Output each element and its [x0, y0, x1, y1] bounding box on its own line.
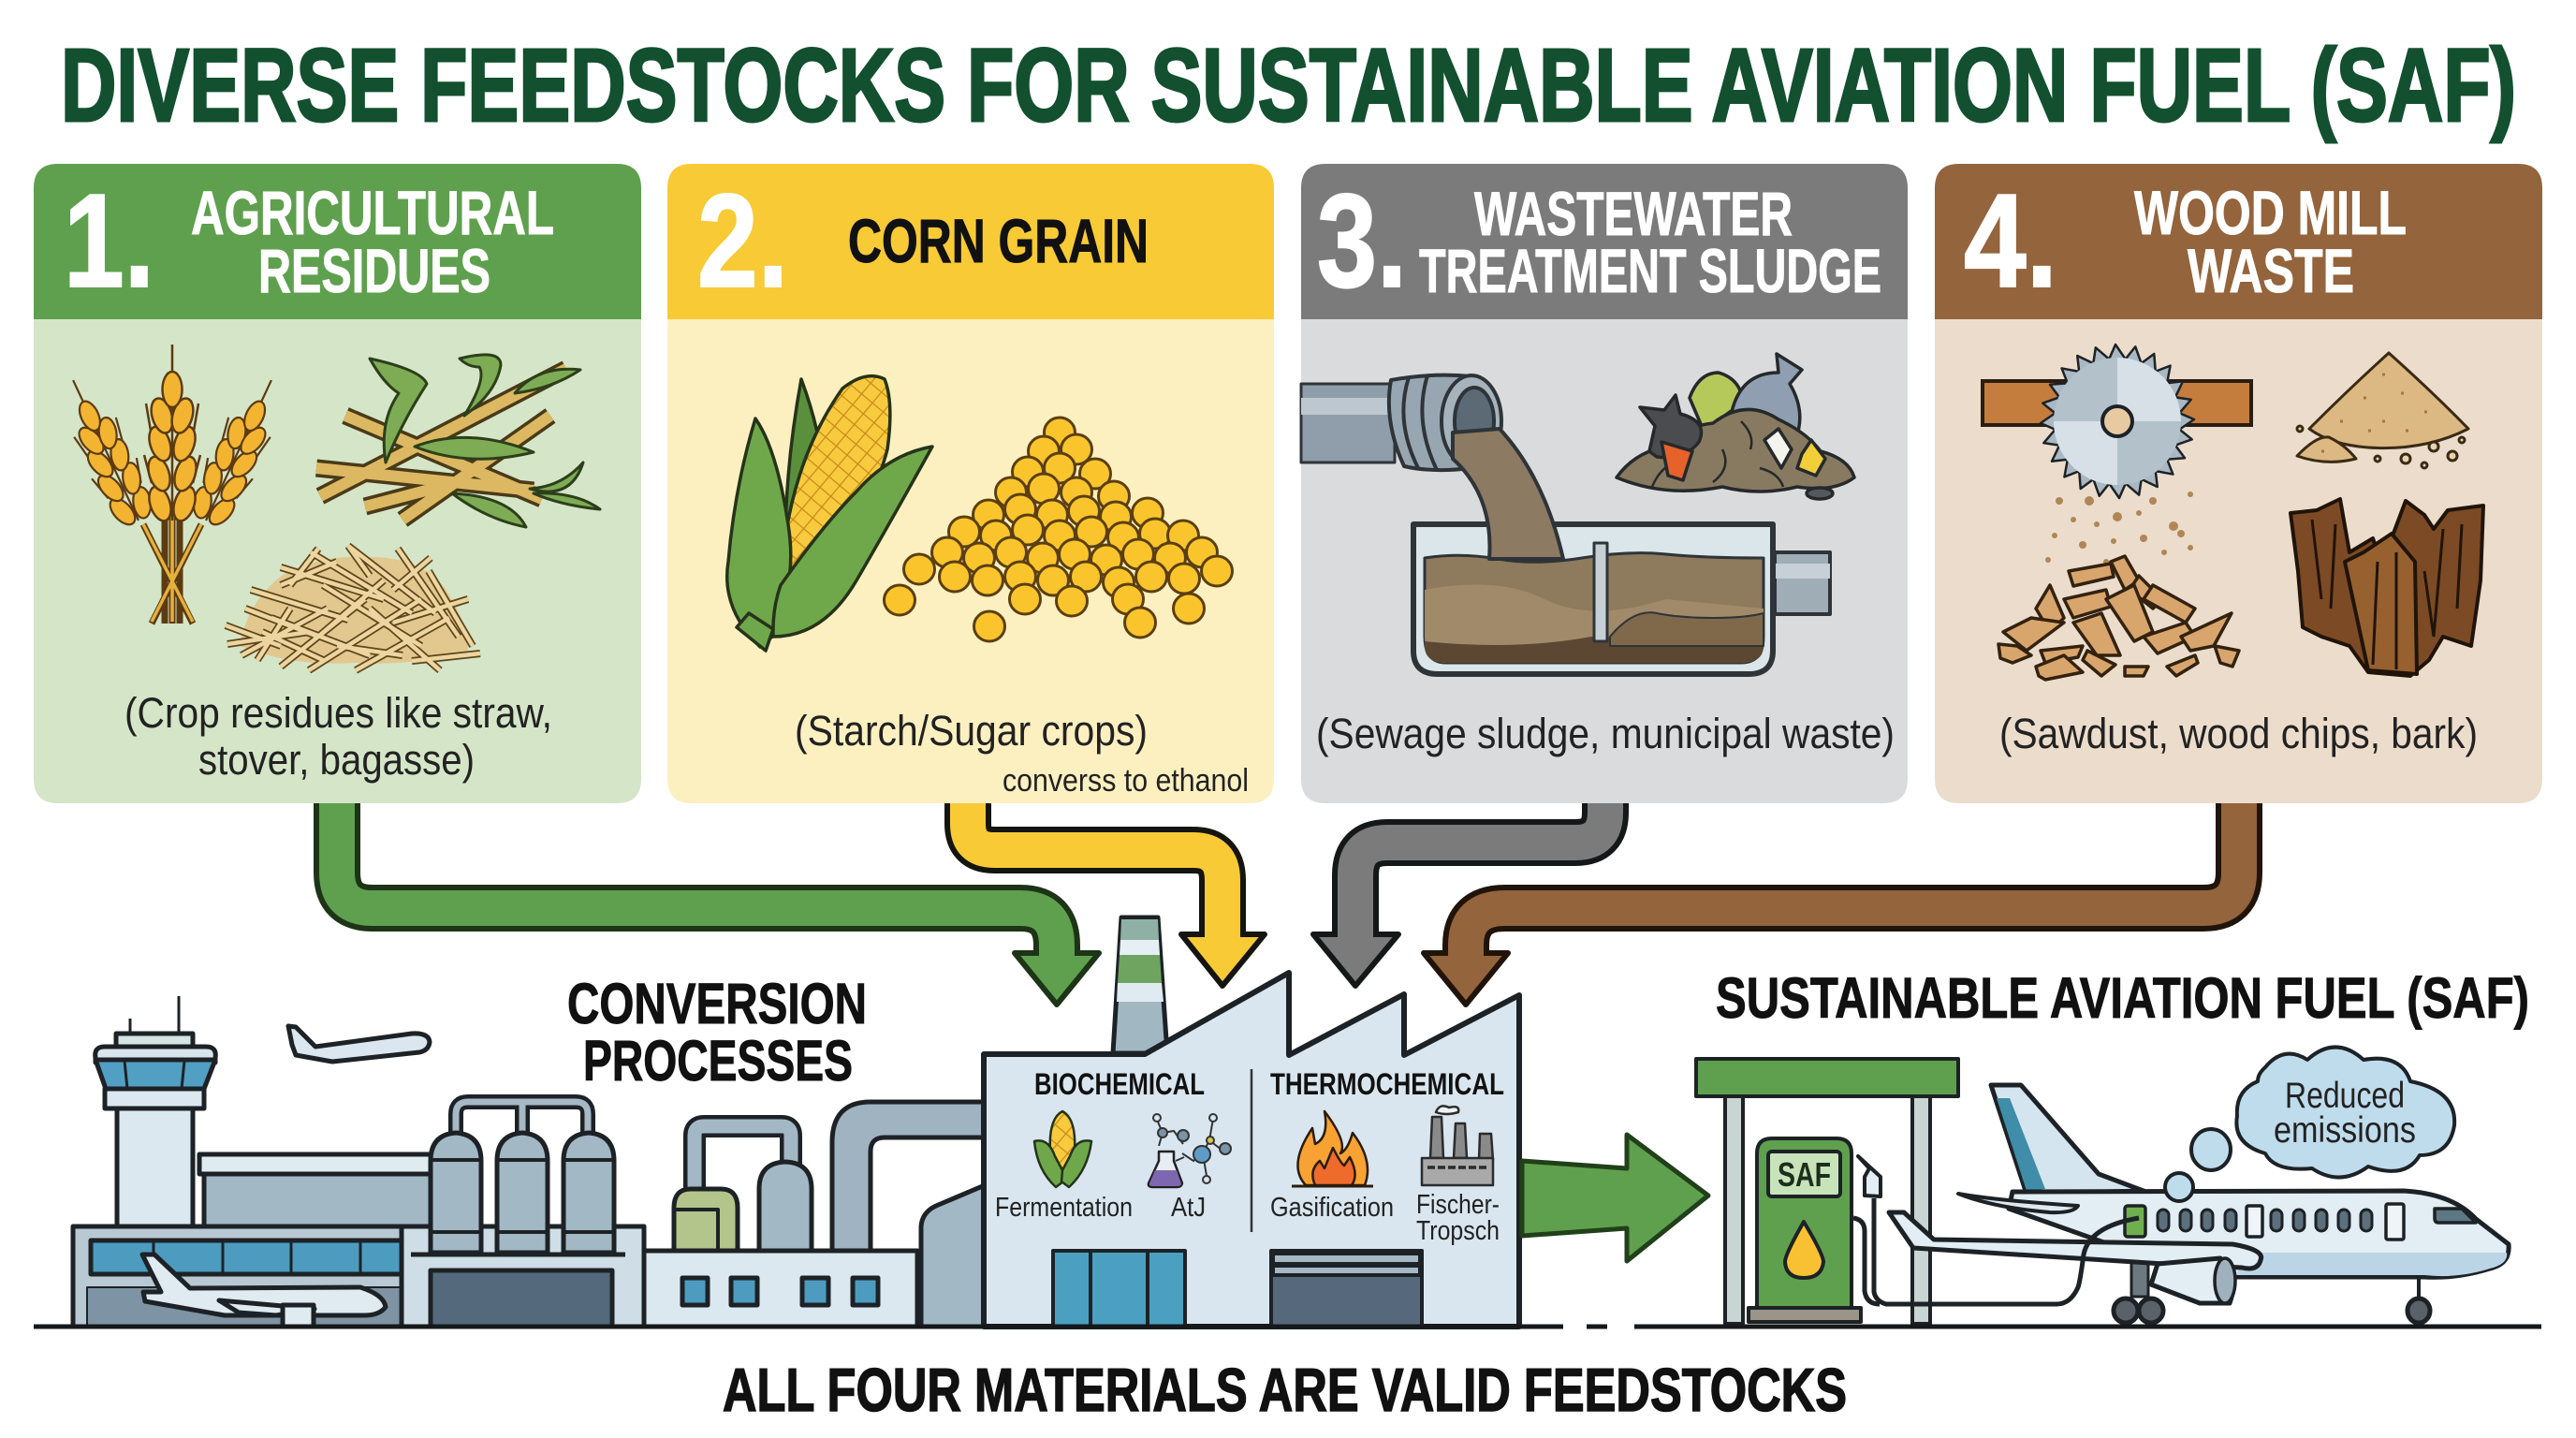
icon: wood chips: [1998, 556, 2239, 680]
arrow: corn grain to factory: [968, 796, 1265, 986]
heading: conversion processes: CONVERSION: [567, 972, 867, 1035]
icon: crop stalks: [316, 355, 600, 527]
fuel port: [2125, 1206, 2145, 1237]
thought cloud: reduced emissions: Reduced: [2285, 1076, 2405, 1116]
heading: RESIDUES: [258, 236, 490, 305]
heading: conversion processes: PROCESSES: [583, 1029, 853, 1093]
label: fischer-tropsch: [1416, 1190, 1500, 1246]
storage tanks with pipes: [431, 1102, 614, 1253]
icon: outflow pipe: [1301, 375, 1501, 470]
panel header: [34, 164, 641, 319]
heading: WASTEWATER: [1474, 179, 1793, 248]
airplane: [1889, 1085, 2509, 1323]
scene: airport and processing plant: [73, 996, 988, 1327]
central plant section: [402, 1226, 644, 1327]
landing gear: [2114, 1259, 2430, 1323]
caption: (Crop residues like straw,: [124, 689, 552, 737]
heading: [2134, 178, 2407, 305]
panel background: [34, 319, 641, 803]
icon: bark: [2291, 499, 2483, 676]
factory: [984, 917, 1519, 1327]
number 4: 4.: [1964, 167, 2057, 315]
label: fischer-tropsch: Tropsch: [1416, 1216, 1500, 1246]
SAF fuel station: [1696, 1059, 1958, 1324]
panel: corn grain: [667, 164, 1274, 803]
engine: [2151, 1258, 2235, 1303]
ground line: [34, 1324, 2541, 1329]
fuselage: [2009, 1191, 2509, 1277]
station posts: [1725, 1096, 1930, 1324]
icon: sawdust pile: [2297, 353, 2468, 468]
factory doors: [1053, 1251, 1422, 1327]
icon: sludge stream: [1453, 429, 1563, 559]
panel: agricultural residues: [34, 164, 641, 803]
wing: [1889, 1212, 2261, 1269]
station canopy: [1696, 1059, 1958, 1096]
arrow: agricultural residues to factory: [337, 796, 1099, 1005]
terminal building: [73, 1226, 402, 1327]
back building: [199, 1154, 433, 1228]
icon: straw pile: [226, 546, 480, 670]
panel header: [1301, 164, 1908, 319]
icon: mini factory: [1422, 1106, 1493, 1185]
label: AtJ: AtJ: [1171, 1193, 1206, 1223]
icon: flask and molecules: [1149, 1114, 1231, 1187]
fuel pump: [1749, 1138, 1861, 1322]
arrow: wastewater sludge to factory: [1313, 796, 1605, 986]
heading: AGRICULTURAL: [191, 178, 554, 247]
doors and cockpit: [2247, 1204, 2476, 1240]
icon: flame: [1292, 1111, 1373, 1186]
heading: [1419, 179, 1881, 305]
arrow: wood mill waste to factory: [1424, 796, 2239, 1005]
panel background: [1935, 319, 2542, 803]
panel background: [667, 319, 1274, 803]
number 1: 1.: [64, 167, 154, 315]
process divider: [1251, 1069, 1252, 1232]
control tower: [95, 996, 215, 1227]
panel: wood mill waste: [1935, 164, 2542, 803]
icon: corn cob: [727, 376, 932, 651]
heading: biochemical: BIOCHEMICAL: [1034, 1067, 1205, 1101]
label: fermentation: Fermentation: [995, 1193, 1133, 1223]
icon: plane in the sky: [288, 1026, 430, 1062]
heading: WASTE: [2188, 236, 2354, 305]
caption: (Starch/Sugar crops): [795, 707, 1148, 755]
icon: saw blade: [1983, 345, 2251, 498]
caption: [124, 689, 552, 784]
heading: conversion processes: [567, 972, 867, 1093]
heading: WOOD MILL: [2134, 178, 2407, 247]
panel: wastewater treatment sludge: [1301, 164, 1908, 803]
note: converts to ethanol: converss to ethanol: [1003, 763, 1249, 799]
heading: CORN GRAIN: [848, 206, 1149, 275]
icon: falling sawdust: [2045, 492, 2193, 565]
number 3: 3.: [1317, 167, 1407, 315]
label: gasification: Gasification: [1270, 1193, 1394, 1223]
windows: [2158, 1210, 2372, 1231]
panel header: [667, 164, 1274, 319]
icon: treatment tank: [1413, 524, 1830, 674]
caption: stover, bagasse): [198, 736, 475, 784]
fuel hose and nozzle: [1853, 1156, 2139, 1304]
panel header: [1935, 164, 2542, 319]
thought cloud: reduced emissions: [2165, 1047, 2454, 1201]
label: fischer-tropsch: Fischer-: [1416, 1190, 1500, 1220]
heading: [191, 178, 554, 305]
fuel pump: SAF: [1778, 1155, 1831, 1194]
heading: thermochemical: THERMOCHEMICAL: [1270, 1067, 1504, 1101]
number 2: 2.: [697, 167, 788, 315]
heading: TREATMENT SLUDGE: [1419, 236, 1881, 305]
tail fin: [1991, 1085, 2144, 1194]
caption: (Sewage sludge, municipal waste): [1316, 710, 1895, 757]
thought cloud: reduced emissions: emissions: [2274, 1110, 2416, 1151]
icon: wheat: [51, 345, 294, 624]
icon: parked plane: [142, 1255, 386, 1327]
icon: corn fermentation: [1034, 1111, 1091, 1187]
chimney: [1113, 917, 1167, 1053]
right plant section: [644, 1102, 988, 1327]
arrow: factory to SAF: [1522, 1135, 1708, 1261]
caption: (Sawdust, wood chips, bark): [1999, 710, 2478, 757]
panel background: [1301, 319, 1908, 803]
stabilizer: [1958, 1194, 2078, 1212]
factory building: [984, 973, 1519, 1327]
icon: waste pile: [1617, 354, 1854, 499]
icon: corn kernels: [884, 418, 1232, 641]
footer text: ALL FOUR MATERIALS ARE VALID FEEDSTOCKS: [723, 1356, 1847, 1424]
